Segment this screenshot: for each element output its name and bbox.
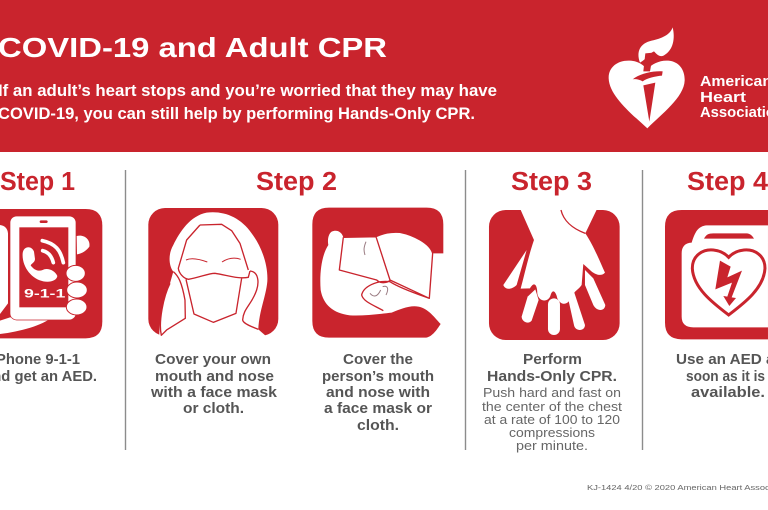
step 2 caption right: a face mask or bbox=[324, 401, 432, 417]
9-1-1 label: 9-1-1 bbox=[24, 286, 66, 300]
icon: hands on chest bbox=[489, 208, 620, 340]
logo wordmark bbox=[700, 73, 768, 121]
step 3 caption: per minute. bbox=[516, 439, 588, 453]
step 3 caption: Perform bbox=[523, 352, 582, 368]
intro text bbox=[0, 82, 497, 123]
logo wordmark: American bbox=[700, 73, 768, 90]
step 2 caption right: person’s mouth bbox=[322, 369, 434, 385]
icon: person wearing a face mask bbox=[148, 208, 278, 337]
step headings: Step 2 bbox=[256, 168, 337, 196]
handset bbox=[23, 247, 57, 282]
wrist line bbox=[561, 210, 585, 233]
step 2 caption right: cloth. bbox=[357, 418, 399, 434]
step 2 caption left: with a face mask bbox=[150, 385, 278, 401]
signal arcs bbox=[42, 241, 63, 263]
step 3 caption: at a rate of 100 to 120 bbox=[484, 413, 620, 427]
step headings: Step 1 bbox=[0, 168, 75, 196]
left thumb bbox=[503, 250, 527, 289]
step 2 caption left bbox=[150, 352, 278, 417]
step 3 caption bbox=[482, 352, 623, 453]
fingers bbox=[66, 265, 87, 315]
step headings: Step 3 bbox=[511, 168, 592, 196]
step 2 caption right bbox=[322, 352, 434, 434]
step headings: Step 4 bbox=[687, 168, 768, 196]
step 3 caption: the center of the chest bbox=[482, 400, 623, 414]
step 4 caption bbox=[676, 352, 768, 401]
icon: phone calling 9-1-1 bbox=[0, 209, 102, 338]
logo torch bbox=[633, 53, 663, 122]
step 1 caption bbox=[0, 352, 97, 385]
step 3 caption: Push hard and fast on bbox=[483, 386, 621, 400]
footer credit: KJ-1424 4/20 © 2020 American Heart Association bbox=[587, 483, 768, 492]
icon: covering a person's mouth and nose bbox=[312, 208, 443, 338]
lower fingers bbox=[522, 270, 605, 335]
upper hand and wrist bbox=[520, 208, 605, 304]
logo heart bbox=[609, 61, 685, 128]
title: COVID-19 and Adult CPR bbox=[0, 32, 387, 63]
step dividers bbox=[126, 170, 642, 450]
icon: AED bbox=[665, 210, 768, 339]
intro text: If an adult’s heart stops and you’re worried that they may have bbox=[0, 82, 497, 100]
step 2 caption right: Cover the bbox=[343, 352, 413, 368]
step 4 caption: available. bbox=[691, 385, 765, 401]
step 2 caption right: and nose with bbox=[326, 385, 430, 401]
header band bbox=[0, 0, 768, 152]
step 2 caption left: mouth and nose bbox=[155, 369, 274, 385]
step 3 caption: compressions bbox=[509, 426, 595, 440]
logo: American Heart Association bbox=[609, 27, 768, 128]
step 3 caption: Hands-Only CPR. bbox=[487, 369, 617, 385]
step 2 caption left: or cloth. bbox=[183, 401, 244, 417]
logo wordmark: Heart bbox=[700, 89, 746, 106]
step 4 caption: soon as it is bbox=[686, 369, 765, 385]
logo flame bbox=[638, 27, 674, 63]
step 2 caption left: Cover your own bbox=[155, 352, 271, 368]
intro text: COVID-19, you can still help by performing Hands-Only CPR. bbox=[0, 105, 475, 123]
step headings bbox=[0, 168, 768, 196]
